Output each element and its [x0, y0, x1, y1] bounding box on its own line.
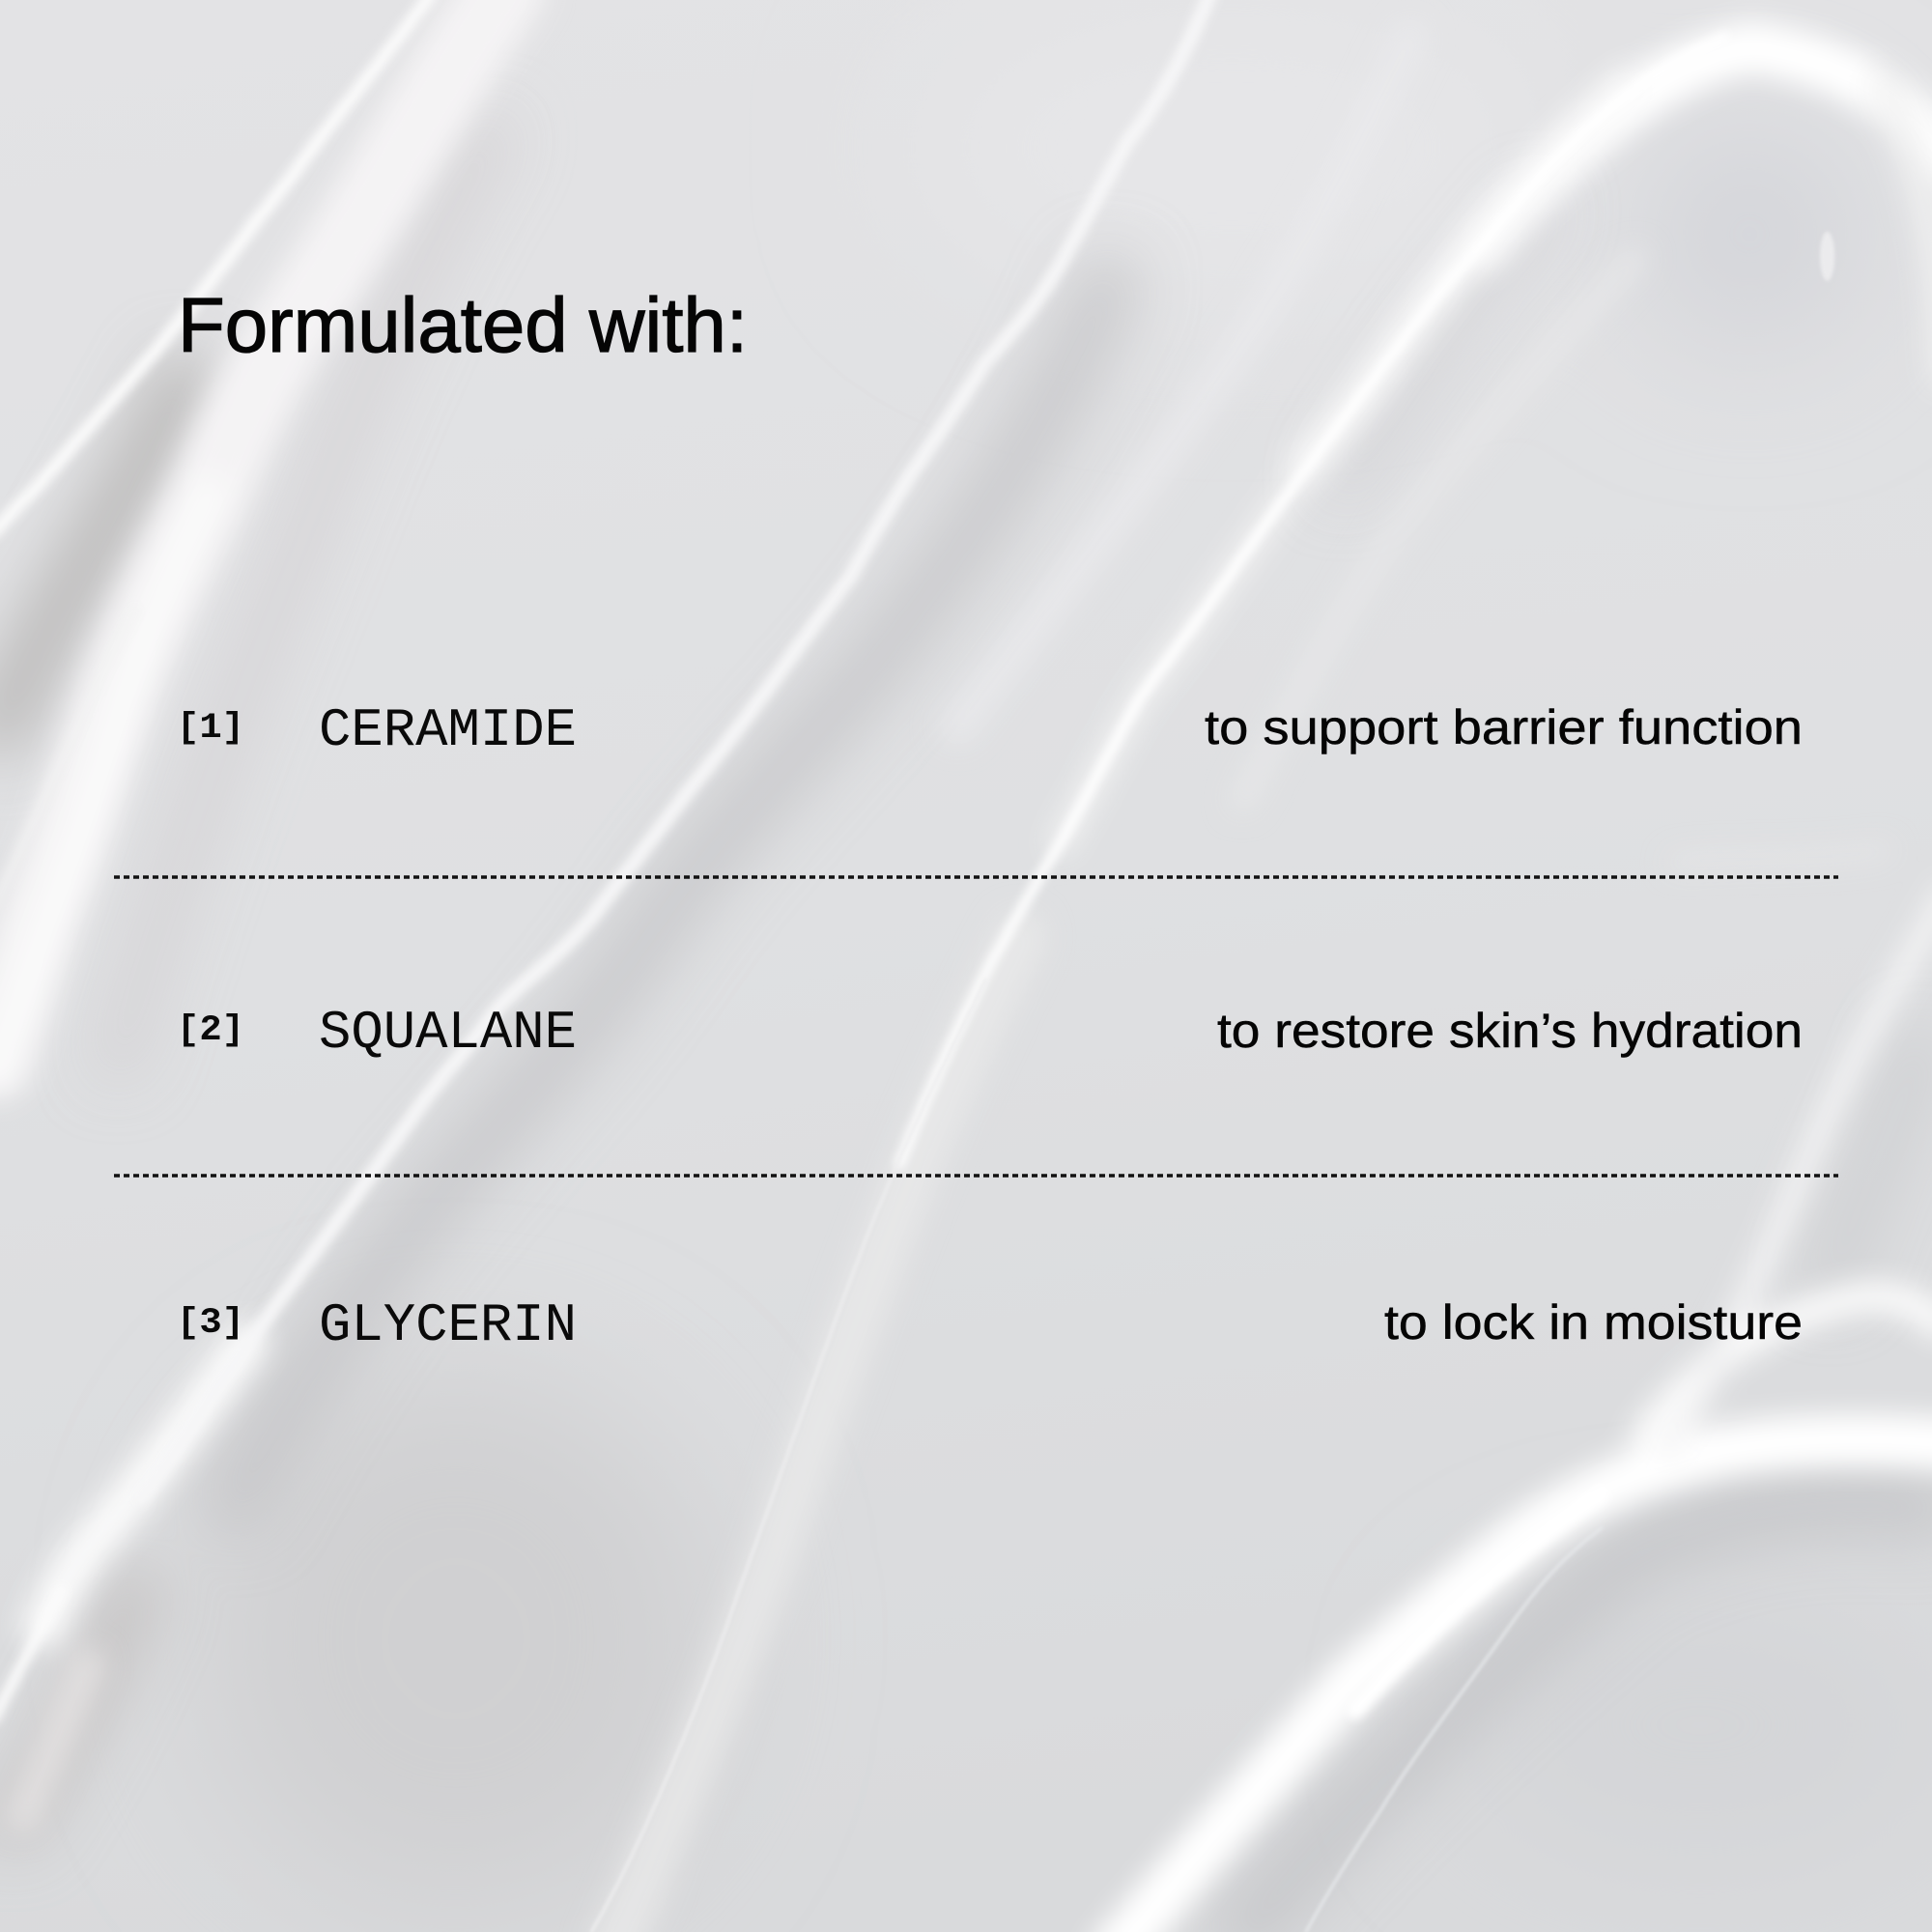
ingredient row 3 [177, 1294, 1803, 1356]
highlights [0, 0, 431, 532]
divider 2 [114, 1174, 1838, 1178]
benefit text 2: to restore skin’s hydration [1217, 1004, 1803, 1058]
number marker 2: [2] [177, 1010, 244, 1051]
bottom left bulge [43, 1343, 246, 1627]
number marker 1: [1] [177, 708, 244, 749]
title: Formulated with: [178, 282, 748, 368]
number marker 3: [3] [177, 1303, 244, 1344]
ingredient row 1 [177, 699, 1803, 761]
ingredient row 2 [177, 1002, 1803, 1064]
ingredient name: ceramide: CERAMIDE [319, 699, 577, 761]
ingredient name: glycerin: GLYCERIN [319, 1294, 577, 1356]
lower arc band [613, 936, 1020, 1932]
benefit text 1: to support barrier function [1205, 700, 1803, 754]
bottom right band [1115, 1440, 1932, 1932]
left white band [0, 0, 505, 1060]
divider 1 [114, 875, 1838, 879]
benefit text 3: to lock in moisture [1384, 1295, 1803, 1350]
faint bands [957, 37, 1410, 727]
arc band [1480, 46, 1932, 246]
ingredient name: squalane: SQUALANE [319, 1002, 577, 1064]
